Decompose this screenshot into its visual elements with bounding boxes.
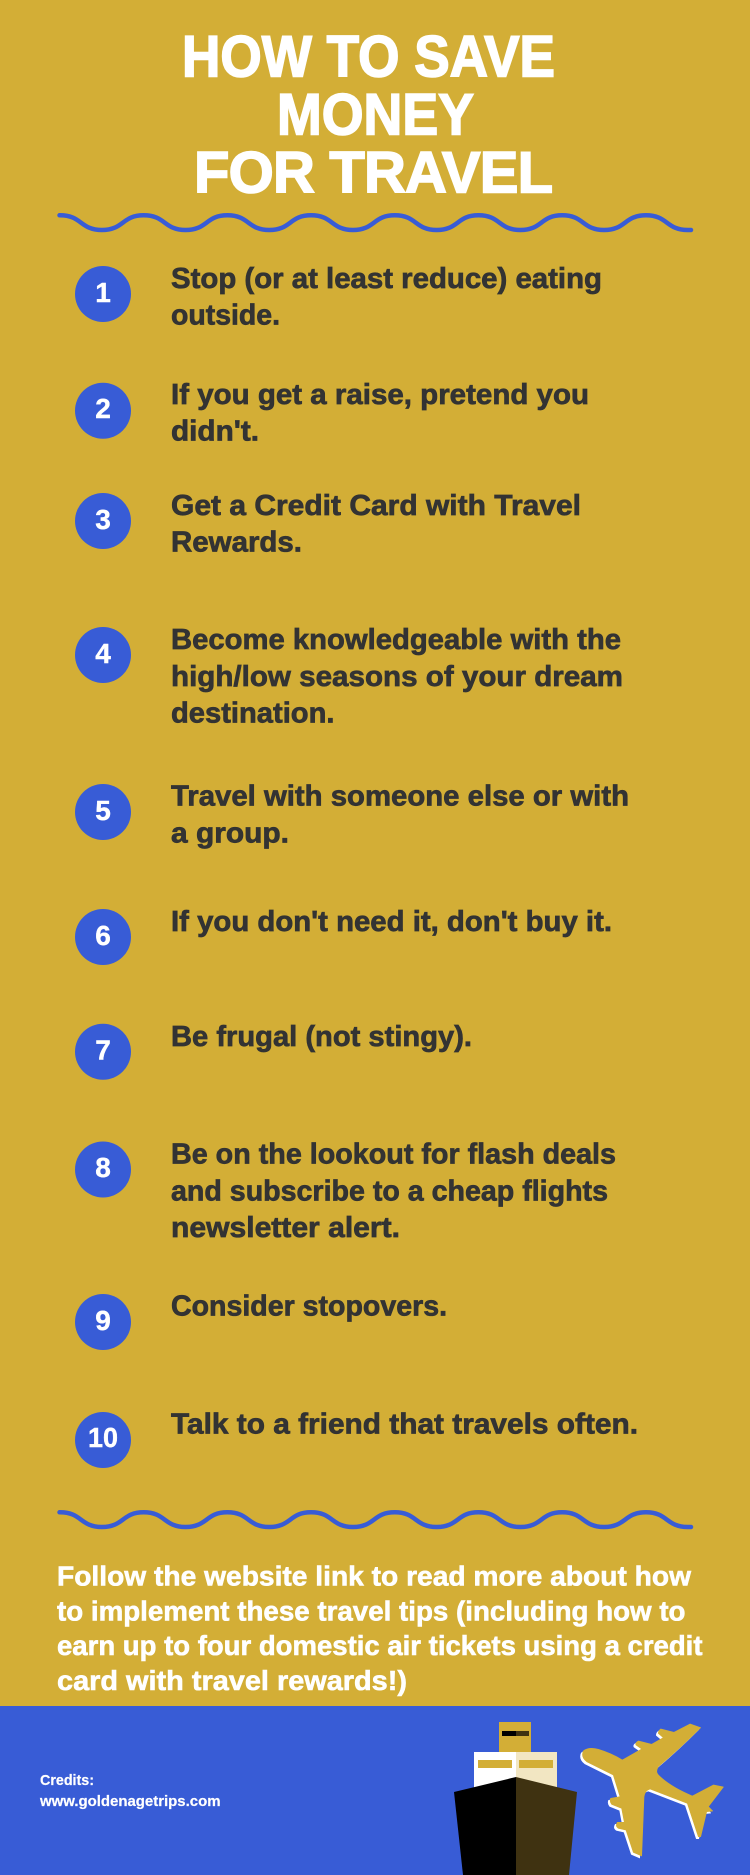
number badge 4: 4 bbox=[95, 638, 111, 669]
title: MONEY bbox=[277, 82, 474, 148]
tip 4 text: Become knowledgeable with the bbox=[171, 624, 621, 656]
number badge 6: 6 bbox=[95, 920, 111, 951]
tip 5 bbox=[75, 781, 629, 849]
tip 5 text: Travel with someone else or with bbox=[171, 781, 629, 813]
title: FOR TRAVEL bbox=[194, 140, 553, 206]
bottom wave divider bbox=[60, 1512, 691, 1527]
number badge 4 bbox=[75, 627, 131, 683]
tip 7 text: Be frugal (not stingy). bbox=[171, 1021, 472, 1053]
number badge 9 bbox=[75, 1294, 131, 1350]
tip 1 text: outside. bbox=[171, 300, 280, 332]
call to action text: to implement these travel tips (including how to bbox=[57, 1596, 686, 1627]
tip 3 text: Rewards. bbox=[171, 526, 302, 558]
number badge 8 bbox=[75, 1142, 131, 1198]
number badge 5 bbox=[75, 784, 131, 840]
number badge 8: 8 bbox=[95, 1152, 111, 1183]
number badge 5: 5 bbox=[95, 795, 111, 826]
tip 2 text: didn't. bbox=[171, 415, 259, 447]
tip 8 text: Be on the lookout for flash deals bbox=[171, 1139, 616, 1171]
icon: airplane bbox=[581, 1724, 723, 1858]
tip 2 bbox=[75, 379, 589, 447]
number badge 6 bbox=[75, 909, 131, 965]
tip 3 text bbox=[171, 490, 581, 558]
tip 8 text: and subscribe to a cheap flights bbox=[171, 1175, 608, 1207]
title: HOW TO SAVE bbox=[182, 24, 555, 90]
number badge 7: 7 bbox=[95, 1034, 111, 1066]
title bbox=[182, 24, 555, 206]
call to action text: Follow the website link to read more about how bbox=[57, 1561, 691, 1592]
tip 4 text: destination. bbox=[171, 697, 334, 729]
number badge 10 bbox=[75, 1412, 131, 1468]
number badge 1: 1 bbox=[95, 277, 111, 308]
call to action text: earn up to four domestic air tickets using a credit bbox=[57, 1630, 702, 1661]
tip 4 text bbox=[171, 624, 623, 729]
tip 9 bbox=[75, 1291, 447, 1350]
tip 9 text: Consider stopovers. bbox=[171, 1291, 447, 1323]
number badge 1 bbox=[75, 266, 131, 322]
call to action text: card with travel rewards!) bbox=[57, 1665, 407, 1696]
tip 4 bbox=[75, 624, 623, 729]
call to action text bbox=[57, 1561, 702, 1696]
tip 1 text: Stop (or at least reduce) eating bbox=[171, 263, 602, 295]
tip 4 text: high/low seasons of your dream bbox=[171, 661, 623, 693]
number badge 2: 2 bbox=[95, 393, 111, 424]
number badge 2 bbox=[75, 383, 131, 439]
tip 3 bbox=[75, 490, 581, 558]
credits text bbox=[39, 1772, 220, 1810]
footer panel bbox=[0, 1706, 750, 1875]
tip 8 bbox=[75, 1139, 616, 1244]
top wave divider bbox=[60, 215, 691, 230]
tip 6 text: If you don't need it, don't buy it. bbox=[171, 906, 612, 938]
tip 10 text: Talk to a friend that travels often. bbox=[171, 1408, 638, 1440]
tip 5 text bbox=[171, 781, 629, 849]
credits text: Credits: bbox=[40, 1772, 94, 1789]
tip 2 text bbox=[171, 379, 589, 447]
number badge 10: 10 bbox=[88, 1422, 118, 1453]
tip 3 text: Get a Credit Card with Travel bbox=[171, 490, 581, 522]
number badge 7 bbox=[75, 1024, 131, 1080]
tip 8 text: newsletter alert. bbox=[171, 1212, 400, 1244]
icon: ship bbox=[454, 1722, 577, 1875]
tip 6 bbox=[75, 906, 612, 965]
tip 5 text: a group. bbox=[171, 817, 289, 849]
number badge 3: 3 bbox=[95, 504, 111, 535]
tip 1 text bbox=[171, 263, 602, 332]
tip 2 text: If you get a raise, pretend you bbox=[171, 379, 589, 411]
tip 1 bbox=[75, 263, 602, 332]
tip 7 bbox=[75, 1021, 472, 1080]
number badge 3 bbox=[75, 493, 131, 549]
credits text: www.goldenagetrips.com bbox=[39, 1793, 220, 1810]
number badge 9: 9 bbox=[95, 1305, 111, 1336]
tip 8 text bbox=[171, 1139, 616, 1244]
tip 10 bbox=[75, 1408, 638, 1468]
